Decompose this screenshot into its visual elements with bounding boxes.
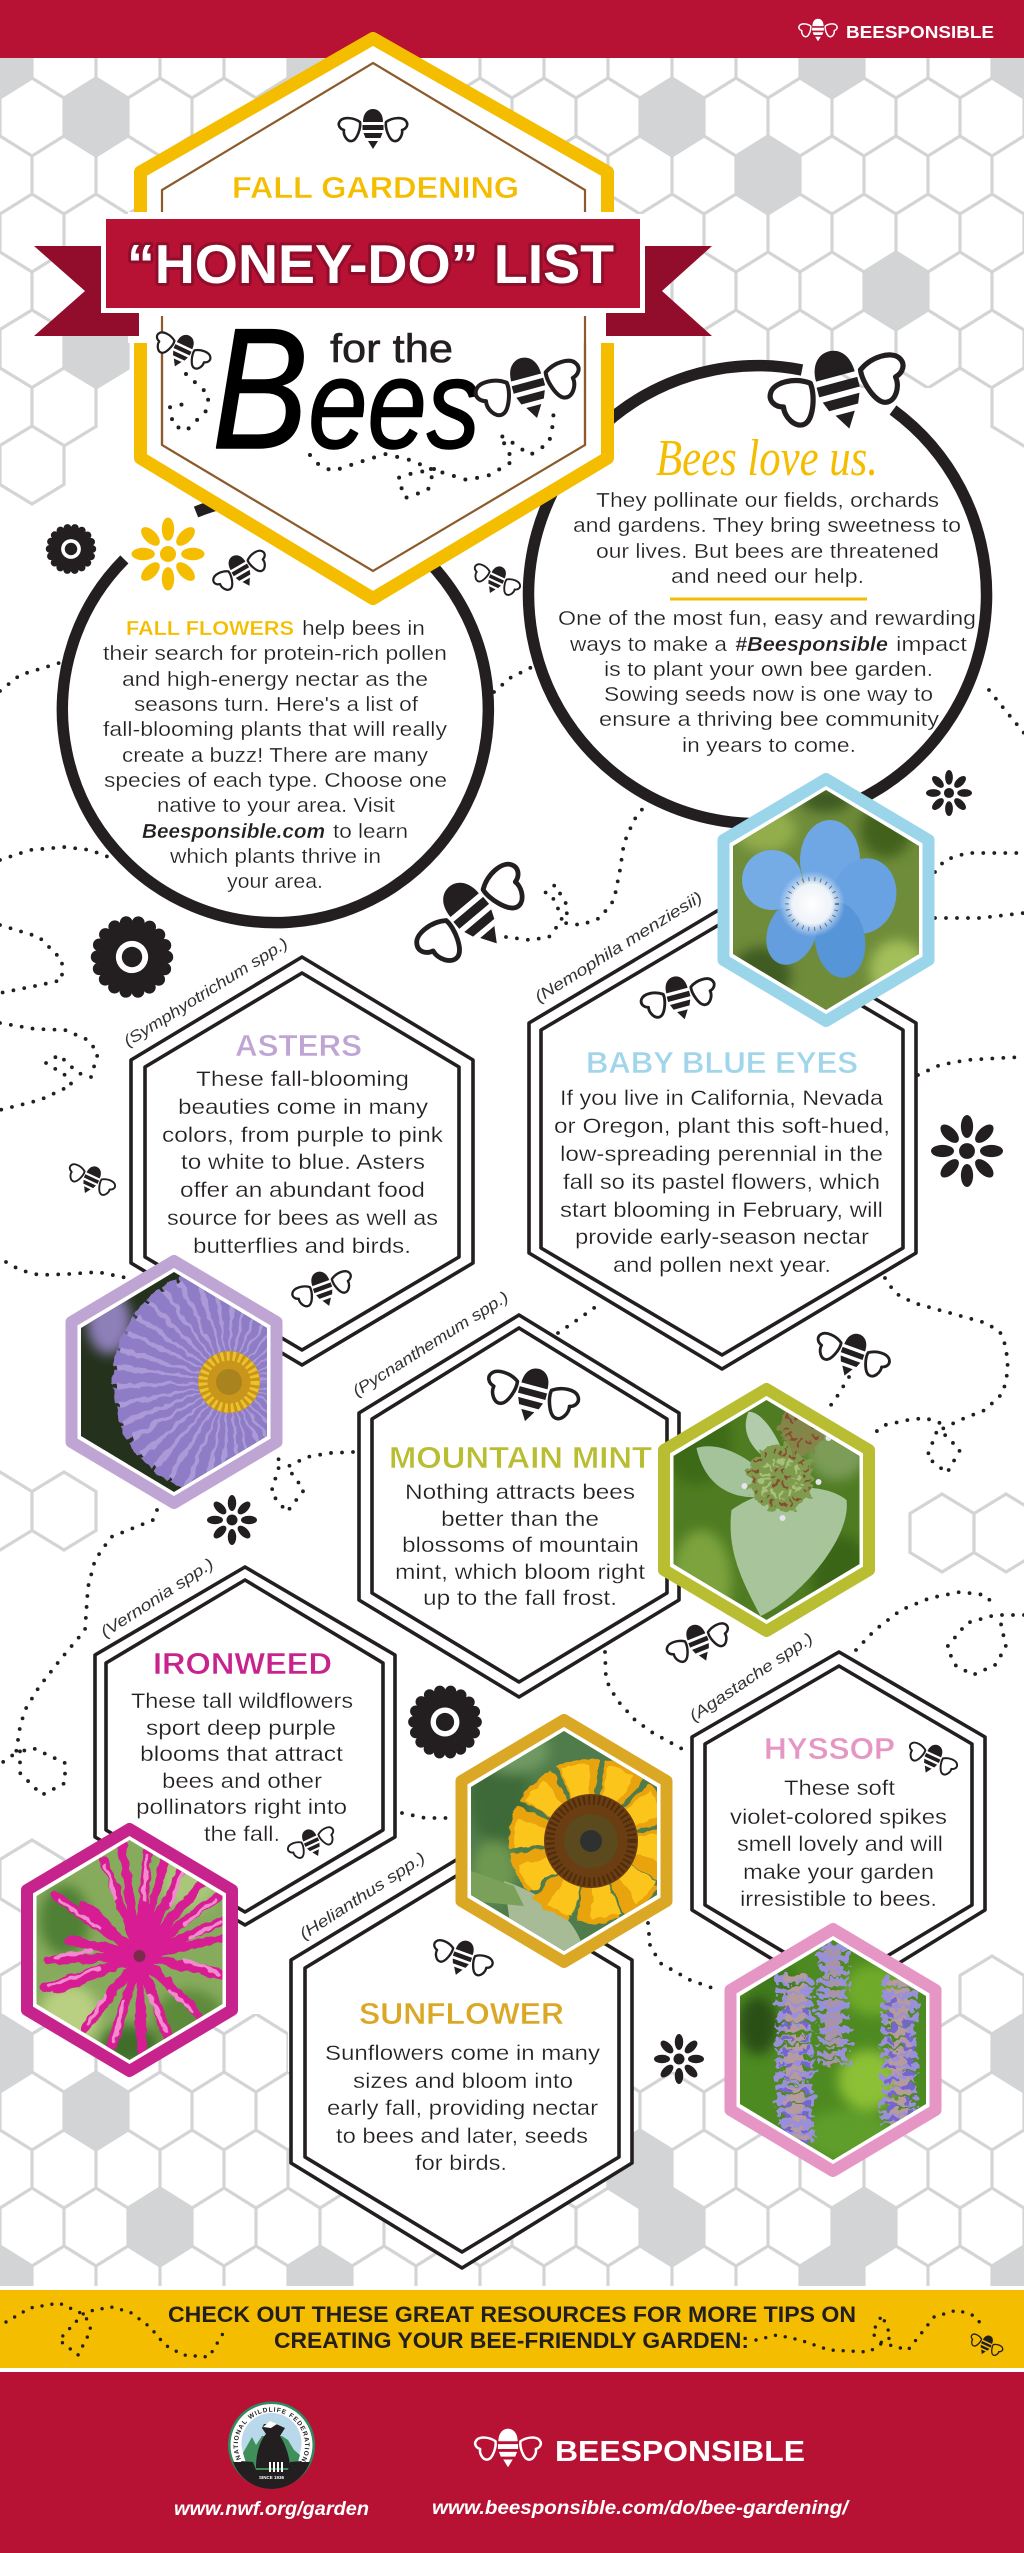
icon: large bee right of Bees: [470, 344, 588, 432]
link: beesponsible: www.beesponsible.com/do/bee-gardening/: [432, 2498, 850, 2519]
title badge hexagon: [128, 38, 620, 598]
text block: check out resources: [168, 2302, 856, 2353]
text block: plant a bee garden: ways to make a: [569, 634, 728, 656]
text block: plant a bee garden: [558, 608, 976, 757]
panel: Fall Flowers circle: [62, 497, 488, 923]
icon: bee in asters card: [288, 1262, 358, 1316]
text block: fall flowers: [103, 618, 447, 893]
icon: bee in ironweed card: [284, 1820, 340, 1866]
text block: mountain mint: better than the: [441, 1508, 599, 1531]
text block: baby blue eyes: provide early-season nectar: [575, 1226, 869, 1249]
logo: National Wildlife Federation: SINCE 1936: [259, 2475, 285, 2480]
text block: baby blue eyes: fall so its pastel flowers, which: [563, 1171, 880, 1194]
header bar: [0, 0, 1024, 58]
text block: fall flowers: your area.: [227, 871, 323, 893]
text block: fall flowers: to learn: [333, 821, 408, 843]
text block: fall flowers: seasons turn. Here's a list of: [134, 694, 418, 716]
text block: asters: These fall-blooming: [196, 1068, 409, 1091]
photo hexagon: hyssop: [730, 1929, 936, 2171]
honeycomb background: middle patches: [0, 1472, 1024, 1572]
text block: why bees matter: our lives. But bees are threatened: [596, 541, 939, 563]
icon: flower under aster hexagon: [207, 1495, 257, 1545]
text block: plant a bee garden: impact: [896, 634, 968, 656]
text block: hyssop: make your garden: [743, 1861, 934, 1884]
icon: flower beside hyssop hexagon: [654, 2034, 704, 2084]
text block: fall flowers: Beesponsible.com: [142, 821, 325, 843]
heading: Honey-Do List: “HONEY-DO” LIST: [127, 233, 614, 295]
text block: hyssop: smell lovely and will: [737, 1833, 943, 1856]
text block: baby blue eyes: start blooming in February, will: [560, 1199, 883, 1222]
text block: asters: source for bees as well as: [167, 1207, 438, 1230]
text block: asters: colors, from purple to pink: [162, 1124, 444, 1147]
text block: why bees matter: and gardens. They bring sweetness to: [573, 515, 961, 537]
label: Nemophila menziesii: (Nemophila menziesii): [532, 889, 706, 1006]
heading: Ironweed: IRONWEED: [153, 1646, 332, 1681]
heading: Baby Blue Eyes: BABY BLUE EYES: [586, 1045, 858, 1080]
text block: hyssop: irresistible to bees.: [740, 1888, 937, 1911]
text block: why bees matter: They pollinate our fields, orchards: [596, 490, 939, 512]
panel: Mountain Mint: [359, 1315, 679, 1697]
text block: baby blue eyes: and pollen next year.: [613, 1254, 831, 1277]
icon: bee in baby blue eyes card: [637, 967, 721, 1029]
honeycomb background: top: [0, 20, 1024, 504]
text block: check out resources: CHECK OUT THESE GREAT RESOURCES FOR MORE TIPS ON: [168, 2302, 856, 2327]
text block: baby blue eyes: or Oregon, plant this soft-hued,: [554, 1115, 890, 1138]
icon: bee below mint hexagon: [662, 1613, 736, 1673]
text block: sunflower: [325, 2042, 601, 2175]
text block: fall flowers: which plants thrive in: [169, 846, 381, 868]
logo: Beesponsible: BEESPONSIBLE: [555, 2436, 805, 2468]
icon: bee above mint hexagon: [809, 1321, 895, 1389]
text block: baby blue eyes: [554, 1087, 890, 1277]
text block: plant a bee garden: is to plant your own bee garden.: [604, 659, 933, 681]
text block: plant a bee garden: One of the most fun, easy and rewarding: [558, 608, 976, 630]
logo: National Wildlife Federation: [228, 2402, 315, 2489]
heading: for the: for the: [330, 327, 453, 371]
text block: plant a bee garden: in years to come.: [682, 735, 856, 757]
icon: dark daisy between cards: [414, 1691, 476, 1753]
text block: mountain mint: blossoms of mountain: [402, 1534, 639, 1557]
text block: ironweed: the fall.: [204, 1823, 280, 1846]
heading: Asters: ASTERS: [235, 1028, 362, 1063]
text block: ironweed: These tall wildflowers: [131, 1690, 353, 1713]
photo hexagon: mountain mint: [662, 1389, 872, 1631]
panel: Sunflower: [291, 1857, 632, 2268]
text block: plant a bee garden: #Beesponsible: [735, 634, 888, 656]
text block: sunflower: sizes and bloom into: [353, 2070, 573, 2093]
icon: flower by blue hexagon: [926, 770, 972, 816]
text block: fall flowers: FALL FLOWERS: [126, 618, 294, 640]
icon: bee near yellow flower: [207, 542, 275, 600]
dotted trails in title badge: [170, 374, 554, 498]
panel: Asters: [131, 957, 473, 1365]
heading: Hyssop: HYSSOP: [764, 1731, 895, 1766]
text block: ironweed: bees and other: [162, 1770, 322, 1793]
text block: fall flowers: fall-blooming plants that will really: [103, 719, 447, 741]
icon: large bee centre: [401, 846, 545, 984]
text block: fall flowers: help bees in: [302, 618, 425, 640]
text block: plant a bee garden: ensure a thriving bee community: [599, 709, 939, 731]
text block: baby blue eyes: low-spreading perennial in the: [560, 1143, 883, 1166]
icon: bee in mountain mint card: [480, 1357, 584, 1433]
text block: fall flowers: and high-energy nectar as the: [122, 669, 428, 691]
icon: flower right of baby blue eyes: [931, 1115, 1003, 1187]
heading: Bees love us: Bees love us.: [656, 430, 878, 487]
panel: Hyssop: [692, 1652, 985, 2000]
text block: sunflower: to bees and later, seeds: [336, 2125, 588, 2148]
label: Agastache: (Agastache spp.): [687, 1630, 816, 1725]
text block: asters: butterflies and birds.: [193, 1235, 411, 1258]
panel: Ironweed: [95, 1567, 395, 1925]
text block: hyssop: These soft: [784, 1777, 895, 1800]
icon: bee in sunflower card: [427, 1931, 497, 1985]
text block: ironweed: blooms that attract: [140, 1743, 343, 1766]
text block: ironweed: [131, 1690, 353, 1846]
text block: hyssop: [730, 1777, 947, 1911]
photo hexagon: aster: [72, 1261, 287, 1503]
logo: National Wildlife Federation: NATIONAL WILDLIFE FEDERATION: [234, 2407, 310, 2462]
header logo: BEESPONSIBLE: [846, 22, 994, 42]
photo hexagon: sunflower: [462, 1720, 666, 1962]
photo hexagon: ironweed: [27, 1829, 232, 2071]
text block: plant a bee garden: Sowing seeds now is one way to: [604, 684, 933, 706]
text block: why bees matter: [573, 490, 961, 588]
dotted bee flight trails: [0, 663, 1024, 1990]
text block: baby blue eyes: If you live in California, Nevada: [560, 1087, 883, 1110]
icon: large bee on Bees love us ring: [763, 334, 915, 446]
photo hexagon: baby blue eyes: [724, 779, 928, 1021]
dotted trail right: [756, 2310, 983, 2352]
label: Vernonia: (Vernonia spp.): [98, 1556, 217, 1641]
text block: fall flowers: create a buzz! There are many: [122, 745, 428, 767]
text block: mountain mint: Nothing attracts bees: [405, 1481, 635, 1504]
text block: mountain mint: up to the fall frost.: [423, 1587, 617, 1610]
footer: [0, 2372, 1024, 2553]
icon: bee at top of badge: [339, 109, 407, 149]
text block: hyssop: violet-colored spikes: [730, 1806, 947, 1829]
honeycomb background: bottom: [0, 1840, 1024, 2324]
label: Symphyotrichum: (Symphyotrichum spp.): [121, 935, 291, 1050]
dotted trail left: [6, 2303, 225, 2357]
heading: Mountain Mint: MOUNTAIN MINT: [389, 1440, 652, 1475]
text block: fall flowers: native to your area. Visit: [157, 795, 395, 817]
text block: sunflower: early fall, providing nectar: [327, 2097, 598, 2120]
heading: Bees script: Bees: [212, 293, 480, 485]
heading: Sunflower: SUNFLOWER: [359, 1996, 564, 2031]
panel: Baby Blue Eyes: [529, 908, 916, 1369]
icon: dark daisy: [50, 528, 92, 570]
text block: asters: to white to blue. Asters: [181, 1151, 425, 1174]
icon: small bee in band: [966, 2329, 1006, 2361]
icon: bee below badge: [468, 557, 524, 603]
text block: ironweed: pollinators right into: [136, 1796, 347, 1819]
text block: check out resources: CREATING YOUR BEE-FRIENDLY GARDEN:: [274, 2328, 749, 2353]
text block: ironweed: sport deep purple: [146, 1717, 336, 1740]
text block: mountain mint: [395, 1481, 645, 1610]
text block: sunflower: Sunflowers come in many: [325, 2042, 601, 2065]
icon: small bee left of Bees: [148, 323, 216, 379]
text block: why bees matter: and need our help.: [671, 566, 864, 588]
logo: Beesponsible: [475, 2429, 805, 2468]
label: Helianthus: (Helianthus spp.): [297, 1850, 429, 1943]
icon: yellow flower: [132, 518, 204, 590]
link: nwf: www.nwf.org/garden: [174, 2499, 369, 2520]
text block: mountain mint: mint, which bloom right: [395, 1561, 645, 1584]
text block: asters: [162, 1068, 444, 1258]
ribbon banner: [34, 214, 712, 336]
text block: fall flowers: their search for protein-rich pollen: [103, 643, 447, 665]
text block: asters: offer an abundant food: [180, 1179, 425, 1202]
icon: bee left of asters: [63, 1157, 119, 1203]
label: Pycnanthemum: (Pycnanthemum spp.): [350, 1289, 512, 1400]
text block: asters: beauties come in many: [178, 1096, 429, 1119]
icon: large dark daisy: [97, 922, 167, 992]
text block: sunflower: for birds.: [415, 2152, 507, 2175]
header logo: [799, 19, 994, 42]
panel: Bees love us circle: [529, 366, 994, 825]
text block: fall flowers: species of each type. Choose one: [104, 770, 447, 792]
icon: bee beside hyssop heading: [902, 1735, 962, 1783]
heading: Fall Gardening: FALL GARDENING: [232, 170, 519, 205]
call-to-action band: [0, 2290, 1024, 2368]
